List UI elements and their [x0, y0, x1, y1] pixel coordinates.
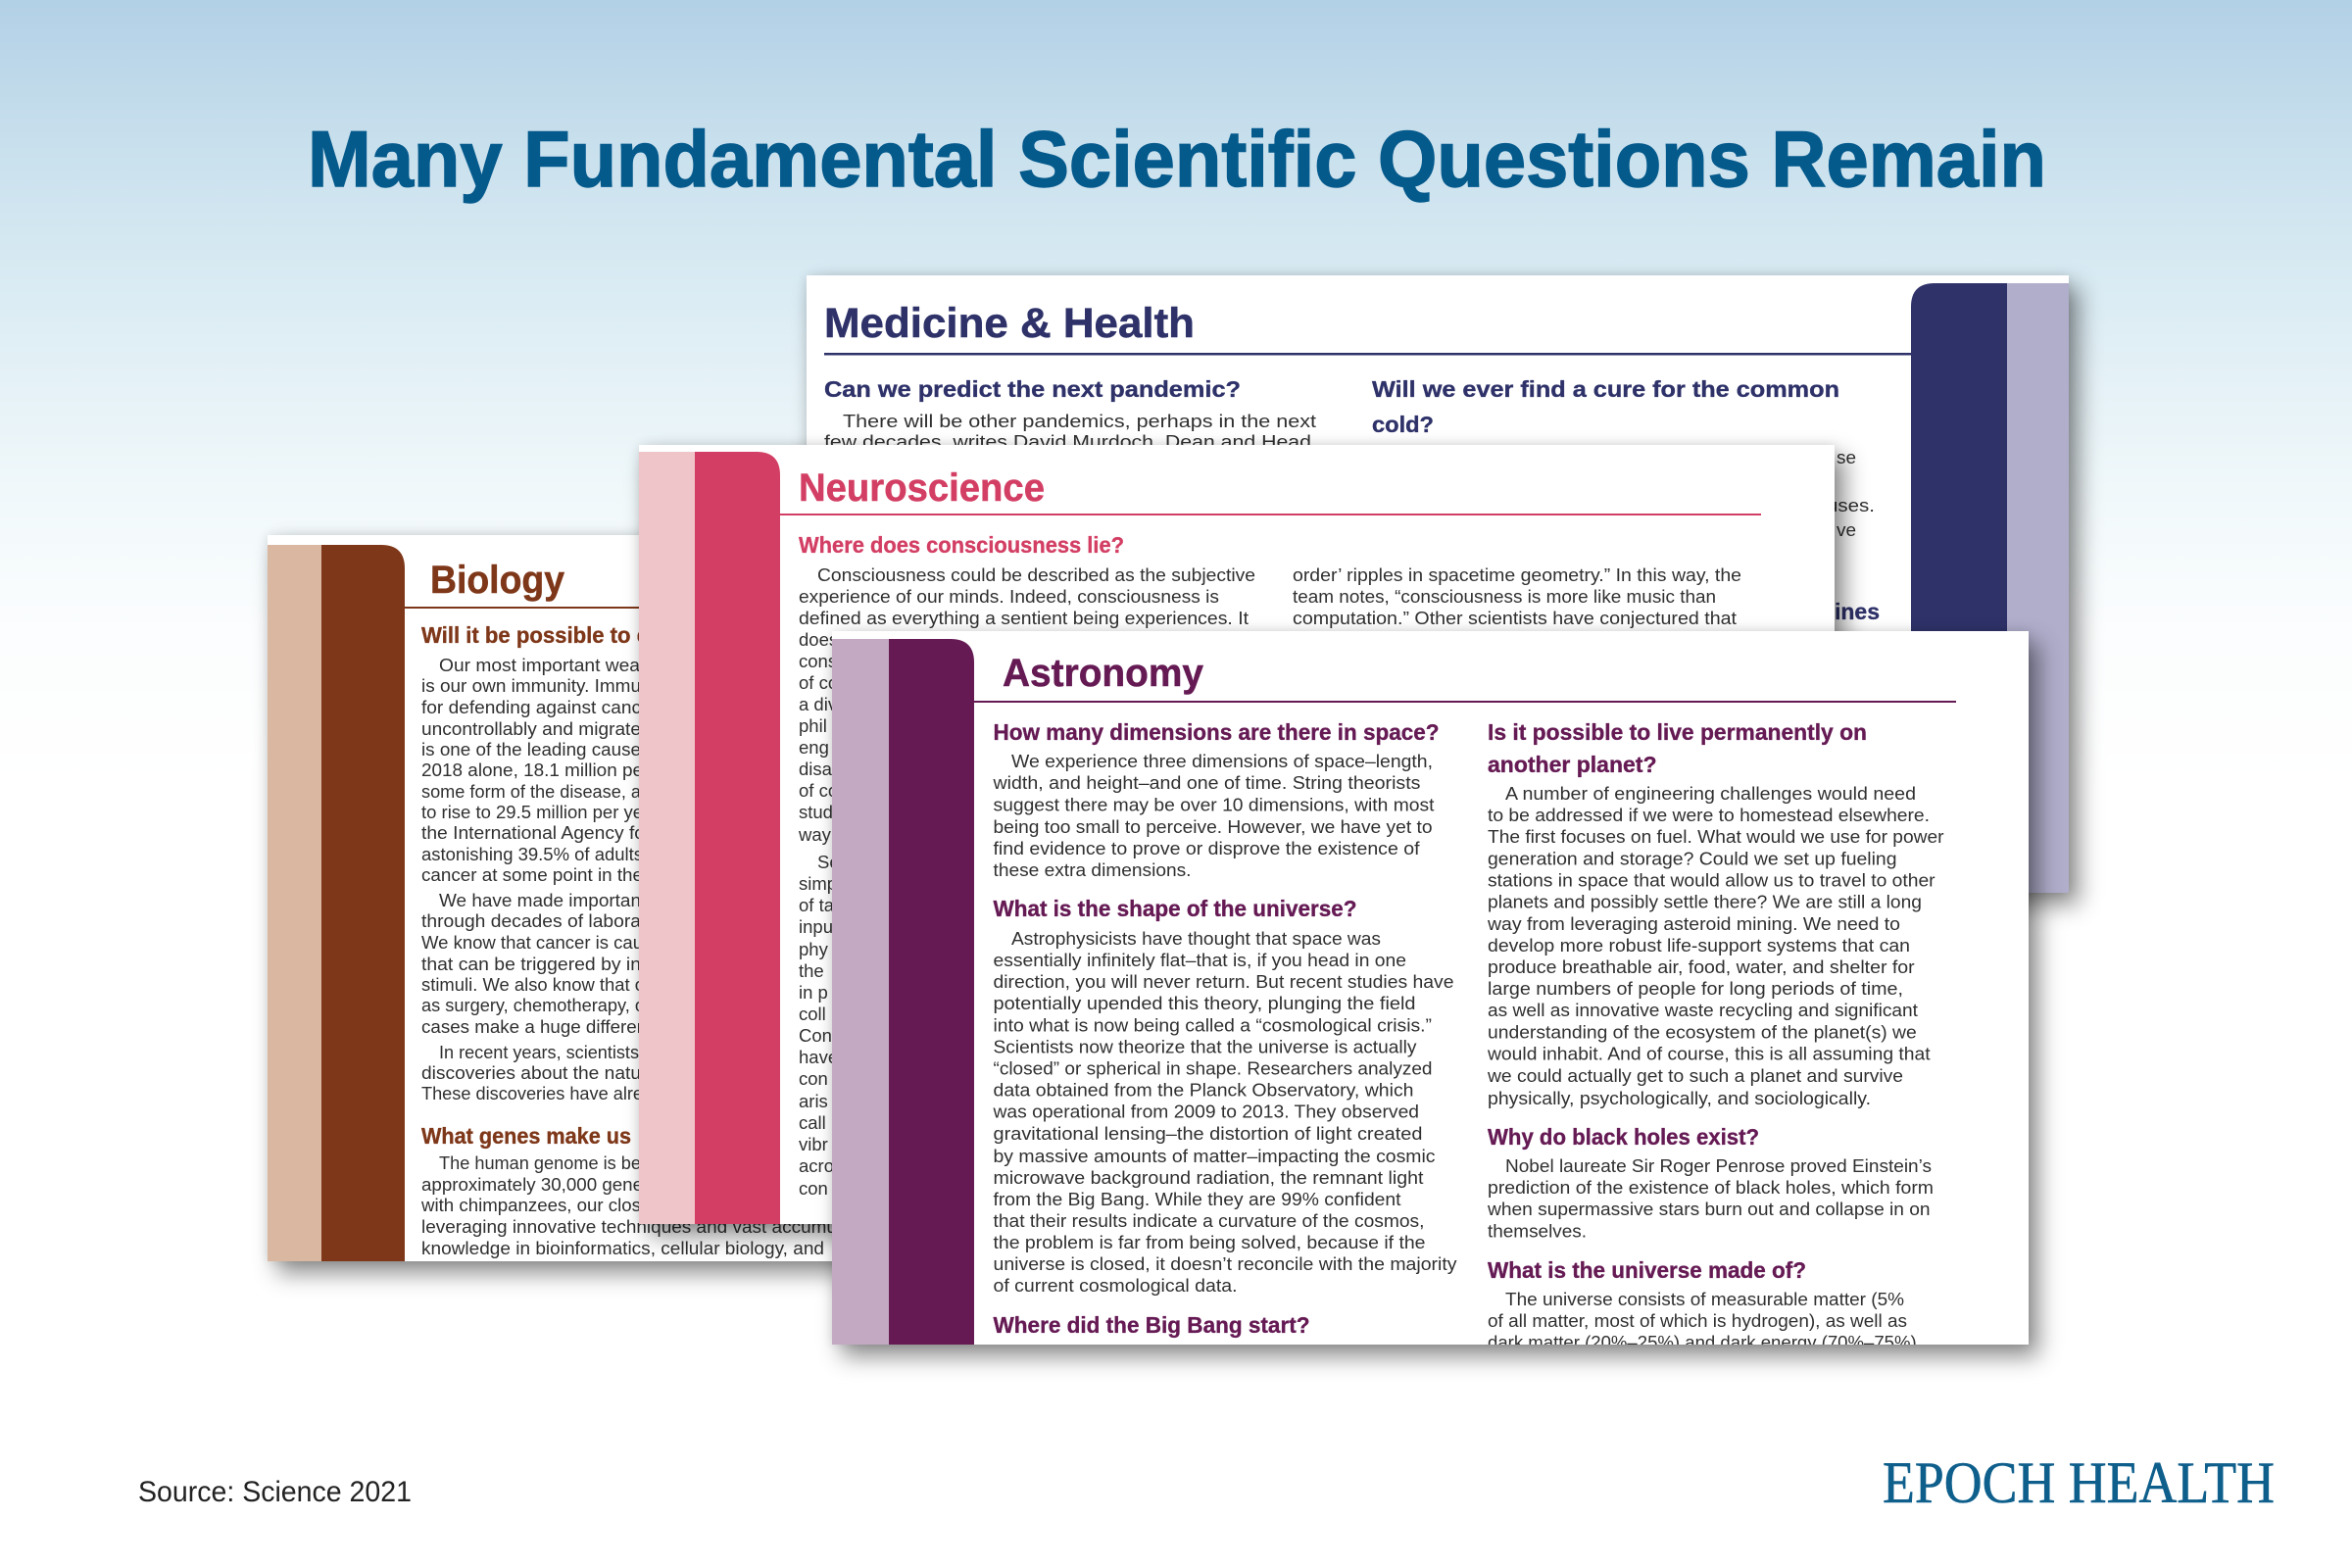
clipped text column: have [799, 1047, 838, 1067]
side strip [1911, 283, 2069, 893]
question: cancer: In recent years, scientists [439, 1042, 639, 1062]
question: common cold: cold? [1372, 412, 1434, 437]
question: shape of the universe: universe is closed, it doesn’t reconcile with the majority [994, 1253, 1457, 1274]
question: dimensions: width, and height–and one of time. String theorists [992, 772, 1421, 793]
question: cancer: for defending against canc [421, 697, 641, 717]
question: pandemic: Can we predict the next pandemic? [824, 376, 1241, 402]
clipped text column: does [799, 629, 838, 650]
question: pandemic [824, 376, 1316, 452]
question: cancer: that can be triggered by in [421, 954, 641, 974]
heading: neuroscience: Neuroscience [799, 466, 1045, 510]
question: cancer: some form of the disease, a [421, 781, 642, 802]
clipped text column: stud [799, 802, 833, 822]
question: consciousness: experience of our minds. Indeed, consciousness is [799, 586, 1219, 607]
question: shape of the universe: gravitational lensing–the distortion of light created [994, 1123, 1423, 1144]
side strip [832, 639, 974, 1345]
question: consciousness [799, 532, 1741, 628]
text fragments beside neuroscience panel: ines [1835, 599, 1880, 624]
question: shape of the universe: Scientists now theorize that the universe is actually [994, 1037, 1417, 1056]
question: black holes: themselves. [1488, 1221, 1587, 1241]
question: black holes: Nobel laureate Sir Roger Penrose proved Einstein’s [1505, 1155, 1932, 1176]
question: shape of the universe: was operational from 2009 to 2013. They observed [992, 1102, 1419, 1121]
clipped text column: con [799, 1068, 828, 1089]
question: cancer: Our most important wea [439, 655, 641, 675]
question: cancer: as surgery, chemotherapy, o [421, 995, 645, 1015]
question: big bang: Where did the Big Bang start? [994, 1312, 1309, 1338]
question: cancer [421, 622, 649, 1103]
panel: medicine and health [807, 275, 2069, 893]
panel: biology [268, 535, 846, 1261]
question: living on another planet: would inhabit. And of course, this is all assuming that [1487, 1043, 1931, 1064]
clipped text column: inpu [799, 916, 833, 937]
source note: Source: Science 2021 [138, 1476, 412, 1508]
question: living on another planet: produce breathable air, food, water, and shelter for [1488, 956, 1915, 977]
clipped text column: phy [799, 939, 829, 959]
question: living on another planet: understanding of the ecosystem of the planet(s) we [1488, 1021, 1917, 1043]
question: cancer: We know that cancer is cau [421, 932, 643, 953]
question: cancer: We have made importan [439, 890, 641, 910]
clipped text column: in p [799, 982, 828, 1003]
question: shape of the universe: Astrophysicists have thought that space was [1011, 928, 1381, 949]
clipped text column [798, 629, 840, 1199]
question: living on another planet: to be addressed if we were to homestead elsewhere. [1488, 805, 1930, 825]
question: living on another planet: as well as innovative waste recycling and significant [1488, 1000, 1918, 1020]
question: living on another planet [1487, 719, 1944, 1108]
question: shape of the universe: into what is now being called a “cosmological crisis.” [994, 1015, 1432, 1035]
clipped text column: Con [799, 1025, 832, 1046]
question: consciousness: team notes, “consciousness is more like music than [1293, 586, 1716, 607]
question: shape of the universe: of current cosmological data. [994, 1275, 1237, 1296]
clipped text column: cons [799, 651, 837, 671]
question: genes: What genes make us [421, 1123, 631, 1149]
question: universe composition: of all matter, most of which is hydrogen), as well as [1488, 1310, 1907, 1331]
question: living on another planet: stations in space that would allow us to travel to other [1488, 870, 1936, 890]
question: living on another planet: large numbers of people for long periods of time, [1488, 978, 1903, 999]
question: common cold [1372, 376, 1839, 437]
question: cancer: cases make a huge differer [421, 1016, 643, 1037]
text fragments beside neuroscience panel: uses. [1827, 495, 1875, 515]
question: dimensions: How many dimensions are there in space? [994, 719, 1439, 745]
clipped text column: eng [799, 737, 829, 758]
heading: biology: Biology [430, 559, 565, 602]
question: universe composition: What is the universe made of? [1488, 1257, 1806, 1283]
question: shape of the universe: essentially infinitely flat–that is, if you head in one [994, 950, 1406, 970]
question: shape of the universe: What is the shape of the universe? [994, 896, 1356, 921]
question: genes: approximately 30,000 gene [421, 1174, 643, 1195]
question: cancer: through decades of labora [421, 910, 642, 931]
question: genes [420, 1123, 837, 1258]
question: cancer: uncontrollably and migrate [421, 718, 641, 739]
question: consciousness: computation.” Other scientists have conjectured that [1293, 608, 1737, 628]
question: cancer: astonishing 39.5% of adults [421, 844, 643, 864]
question: pandemic: few decades, writes David Murdoch, Dean and Head [824, 431, 1311, 452]
text fragments beside neuroscience panel [1827, 447, 1880, 624]
question: cancer: 2018 alone, 18.1 million pe [421, 760, 643, 780]
question: cancer: Will it be possible to c [421, 622, 649, 648]
question: living on another planet: we could actually get to such a planet and survive [1487, 1065, 1903, 1086]
question: cancer: discoveries about the natu [421, 1062, 641, 1083]
question: dimensions: We experience three dimensions of space–length, [1011, 751, 1433, 771]
question: living on another planet: way from leveraging asteroid mining. We need to [1487, 913, 1900, 934]
question: common cold: Will we ever find a cure for the common [1372, 376, 1839, 402]
question: universe composition [1488, 1257, 1917, 1352]
side strip [639, 452, 780, 1224]
question: genes: with chimpanzees, our clos [420, 1195, 641, 1215]
question: living on another planet: generation and storage? Could we set up fueling [1488, 849, 1897, 868]
question: living on another planet: physically, psychologically, and sociologically. [1488, 1088, 1871, 1108]
question: cancer: is one of the leading cause [421, 739, 641, 760]
question: cancer: is our own immunity. Immu [421, 675, 641, 696]
question: living on another planet: planets and possibly settle there? We are still a long [1488, 892, 1922, 911]
clipped text column: phil [799, 715, 827, 736]
title: Many Fundamental Scientific Questions Remain [308, 116, 2046, 204]
clipped text column: disa [799, 759, 833, 779]
question: living on another planet: develop more robust life-support systems that can [1488, 935, 1910, 956]
question: shape of the universe: the problem is far from being solved, because if the [994, 1232, 1425, 1252]
clipped text column: of co [799, 672, 838, 693]
question: genes: knowledge in bioinformatics, cellular biology, and [421, 1238, 824, 1258]
clipped text column: acro [799, 1155, 834, 1176]
clipped text column: con [799, 1178, 828, 1199]
question: dimensions: suggest there may be over 10 dimensions, with most [994, 794, 1435, 815]
question: consciousness: Consciousness could be described as the subjective [817, 564, 1255, 585]
question: dimensions: find evidence to prove or disprove the existence of [994, 838, 1420, 858]
clipped text column: aris [799, 1091, 828, 1111]
question: cancer: to rise to 29.5 million per ye [421, 802, 643, 822]
clipped text column: the [799, 960, 824, 981]
question: black holes [1487, 1124, 1934, 1241]
question: black holes: Why do black holes exist? [1488, 1124, 1759, 1150]
question: shape of the universe: potentially upended this theory, plunging the field [994, 993, 1415, 1013]
heading: astronomy: Astronomy [1003, 652, 1204, 695]
question: shape of the universe: by massive amounts of matter–impacting the cosmic [994, 1146, 1435, 1166]
question: shape of the universe: that their results indicate a curvature of the cosmos, [994, 1210, 1425, 1231]
question: living on another planet: The first focuses on fuel. What would we use for power [1488, 826, 1944, 847]
question: dimensions [992, 719, 1439, 880]
question: cancer: the International Agency fo [421, 822, 645, 843]
question: black holes: prediction of the existence of black holes, which form [1488, 1177, 1934, 1198]
clipped text column: of ta [799, 895, 835, 915]
question: shape of the universe: data obtained from the Planck Observatory, which [994, 1080, 1413, 1100]
side strip [268, 545, 405, 1261]
question: cancer: These discoveries have alre [421, 1083, 643, 1103]
clipped text column: of co [799, 780, 838, 801]
clipped text column: vibr [799, 1134, 828, 1154]
question: shape of the universe [992, 896, 1457, 1296]
clipped text column: a div [799, 694, 838, 714]
panel: astronomy [832, 631, 2029, 1345]
question: shape of the universe: from the Big Bang. While they are 99% confident [994, 1189, 1401, 1209]
question: shape of the universe: direction, you will never return. But recent studies have [994, 971, 1454, 992]
clipped text column: So [817, 852, 840, 872]
question: pandemic: There will be other pandemics, perhaps in the next [843, 411, 1316, 431]
question: dimensions: these extra dimensions. [994, 859, 1192, 880]
clipped text column: simp [799, 873, 837, 894]
question: living on another planet: A number of engineering challenges would need [1505, 783, 1916, 804]
question: black holes: when supermassive stars burn out and collapse in on [1487, 1199, 1931, 1219]
question: universe composition: The universe consists of measurable matter (5% [1505, 1289, 1904, 1309]
question: consciousness: Where does consciousness lie? [799, 532, 1124, 558]
question: living on another planet: Is it possible to live permanently on [1488, 719, 1867, 745]
question: cancer: cancer at some point in the [421, 864, 643, 885]
text fragments beside neuroscience panel: ve [1837, 519, 1856, 540]
question: genes: The human genome is be [439, 1152, 641, 1173]
clipped text column: coll [799, 1004, 826, 1024]
question: consciousness: defined as everything a sentient being experiences. It [799, 608, 1249, 628]
question: living on another planet: another planet? [1488, 752, 1656, 777]
question: shape of the universe: microwave background radiation, the remnant light [994, 1167, 1423, 1188]
clipped text column: way [798, 824, 832, 845]
heading: medicine and health: Medicine & Health [824, 300, 1195, 347]
question: dimensions: being too small to perceive. However, we have yet to [994, 816, 1433, 837]
text fragments beside neuroscience panel: se [1837, 447, 1856, 467]
question: genes: leveraging innovative techniques and vast accumu [421, 1216, 837, 1237]
question: cancer: stimuli. We also know that o [421, 974, 645, 995]
question: shape of the universe: “closed” or spherical in shape. Researchers analyzed [994, 1058, 1433, 1078]
panel: neuroscience [639, 445, 1835, 1224]
clipped text column: call [799, 1112, 826, 1133]
question: consciousness: order’ ripples in spacetime geometry.” In this way, the [1293, 564, 1741, 585]
